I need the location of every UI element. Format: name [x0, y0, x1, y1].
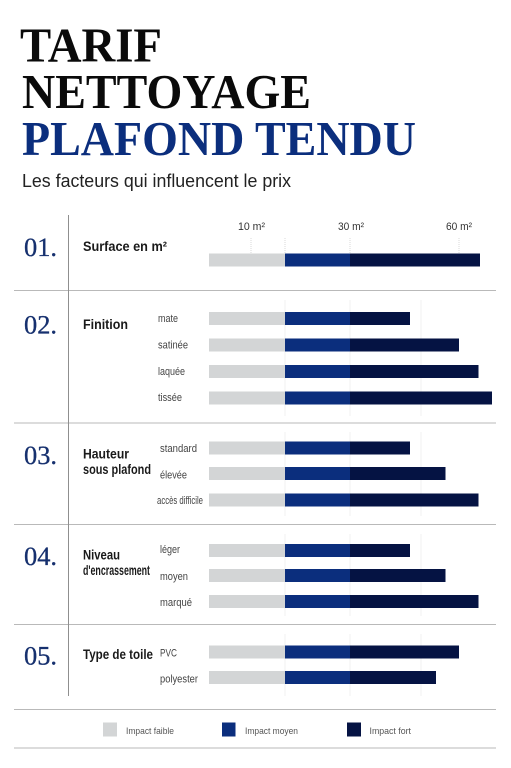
- bars: finition: [209, 312, 492, 404]
- panel: finition: [24, 310, 492, 404]
- panel: finition: 02.: [24, 310, 57, 340]
- title: PLAFOND TENDU: [22, 111, 416, 166]
- legend: Impact fort: [370, 726, 411, 737]
- axis scale: 60 m²: [446, 221, 472, 233]
- panel: type de toile: [24, 642, 459, 686]
- panel: finition: laquée: [158, 366, 185, 378]
- panel: hauteur sous plafond: élevée: [160, 470, 187, 482]
- panel: type de toile: 05.: [24, 642, 57, 670]
- panel: hauteur sous plafond: 03.: [24, 441, 57, 470]
- subtitle: Les facteurs qui influencent le prix: [22, 170, 292, 191]
- panel: niveau d'encrassement: 04.: [24, 542, 57, 571]
- panel: niveau d'encrassement: [24, 542, 478, 609]
- axis scale: 30 m²: [338, 221, 364, 233]
- panel: type de toile: PVC: [160, 648, 177, 660]
- panel: finition: Finition: [83, 317, 128, 332]
- panel: niveau d'encrassement: léger: [160, 544, 180, 556]
- legend: Impact moyen: [245, 726, 298, 737]
- panel: niveau d'encrassement: Niveau: [83, 548, 120, 562]
- panel: hauteur sous plafond: accès difficile: [157, 495, 203, 507]
- bar: surface: [209, 254, 480, 266]
- title: [20, 18, 416, 166]
- panel: finition: satinée: [158, 340, 188, 352]
- panel: hauteur sous plafond: standard: [160, 443, 197, 455]
- panel: finition: tissée: [158, 392, 182, 404]
- legend: [103, 722, 411, 737]
- title: NETTOYAGE: [22, 64, 311, 119]
- panel: hauteur sous plafond: Hauteur: [83, 446, 130, 462]
- panel: surface: 01.: [24, 233, 57, 262]
- panel: niveau d'encrassement: d'encrassement: [83, 563, 150, 578]
- title: TARIF: [20, 18, 162, 72]
- panel: hauteur sous plafond: [24, 441, 478, 507]
- panel: surface: [24, 221, 480, 266]
- axis scale: 10 m²: [238, 221, 265, 233]
- panel: type de toile: polyester: [160, 674, 198, 686]
- legend: Impact faible: [126, 726, 174, 737]
- panel: finition: mate: [158, 313, 178, 325]
- panel: type de toile: Type de toile: [83, 647, 153, 662]
- bars: toile: [209, 646, 459, 684]
- bars: encrassement: [209, 544, 478, 608]
- bars: hauteur: [209, 442, 478, 506]
- panel: niveau d'encrassement: moyen: [160, 571, 188, 583]
- panel: niveau d'encrassement: marqué: [160, 597, 192, 609]
- axis scale: [238, 221, 472, 266]
- panel: surface: Surface en m²: [83, 239, 167, 254]
- panel: hauteur sous plafond: sous plafond: [83, 462, 151, 477]
